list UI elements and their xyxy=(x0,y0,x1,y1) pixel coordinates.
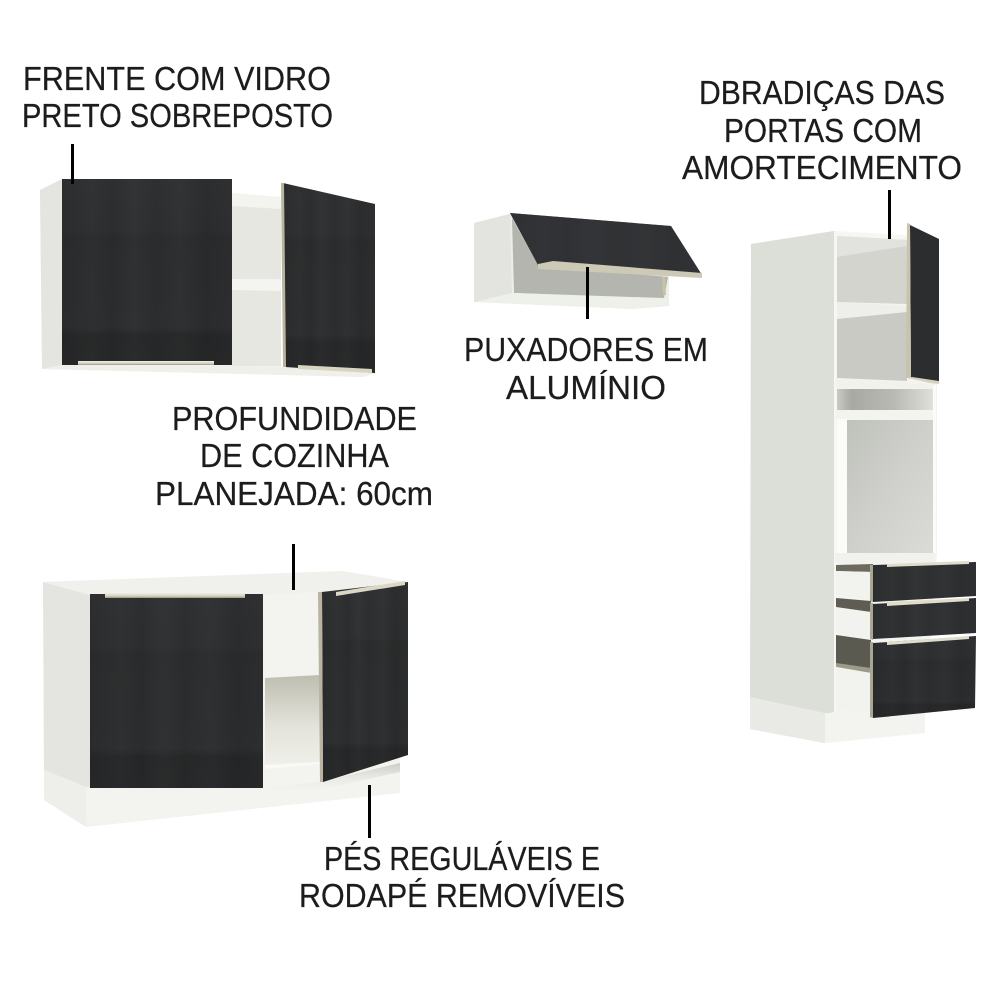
side panel xyxy=(40,179,62,369)
callout: pés reguláveis: RODAPÉ REMOVÍVEIS xyxy=(299,877,625,914)
callout: frente com vidro: FRENTE COM VIDRO xyxy=(23,60,331,97)
handle: left door xyxy=(78,361,214,365)
callout: pés reguláveis: PÉS REGULÁVEIS E xyxy=(324,840,600,877)
side panel xyxy=(750,231,834,743)
handle: right door xyxy=(336,581,405,596)
callout: frente com vidro xyxy=(22,60,333,184)
drawer: middle xyxy=(836,598,976,640)
callout: dobradiças: PORTAS COM xyxy=(724,112,922,149)
drawer: top xyxy=(836,561,976,602)
interior upper xyxy=(837,236,907,304)
door: left closed xyxy=(90,594,263,788)
oven cavity xyxy=(847,420,933,553)
callout: dobradiças xyxy=(682,74,962,239)
callout: profundidade: DE COZINHA xyxy=(200,437,389,474)
door: tower open xyxy=(910,225,939,382)
cabinet: base two-door xyxy=(43,571,408,827)
interior xyxy=(512,218,668,298)
callout: puxadores xyxy=(464,267,708,406)
callout: frente com vidro: PRETO SOBREPOSTO xyxy=(22,97,333,134)
callout: dobradiças: AMORTECIMENTO xyxy=(682,149,962,186)
handle: flip-up door xyxy=(538,261,702,278)
callout: profundidade: PROFUNDIDADE xyxy=(172,400,417,437)
callout: pés reguláveis xyxy=(299,785,625,914)
door: right open xyxy=(322,582,408,782)
side panel xyxy=(43,582,90,787)
callout: puxadores: ALUMÍNIO xyxy=(506,369,666,406)
top surface xyxy=(43,571,408,596)
handle: right door xyxy=(298,365,372,373)
door: left closed xyxy=(62,179,232,365)
door: flip-up xyxy=(510,213,702,275)
callout: puxadores: PUXADORES EM xyxy=(464,331,708,368)
cabinet: wall unit with flip-up door xyxy=(474,213,702,309)
handle: left door xyxy=(105,593,245,598)
drawer: bottom xyxy=(836,635,976,718)
callout: profundidade xyxy=(155,400,433,590)
callout: profundidade: PLANEJADA: 60cm xyxy=(155,475,433,512)
cabinet: tall tower with drawers xyxy=(750,223,976,743)
door: right open xyxy=(283,183,375,373)
callout: dobradiças: DBRADIÇAS DAS xyxy=(699,74,945,111)
interior xyxy=(263,592,320,678)
side panel xyxy=(474,214,512,302)
cabinet: upper two-door xyxy=(40,179,375,377)
